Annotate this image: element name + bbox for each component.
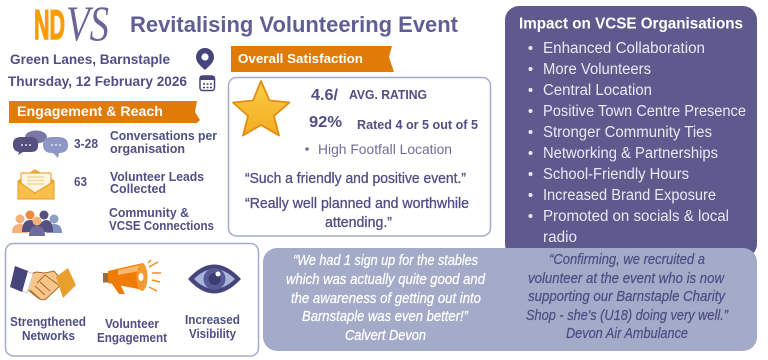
bullet: high footfall: High Footfall Location (318, 141, 452, 157)
quote: Calvert Devon: which was actually quite good and (286, 272, 486, 288)
icon: megaphone (103, 260, 161, 294)
ribbon: engagement and reach: Engagement & Reach (17, 103, 163, 119)
impact list: Stronger Community Ties (543, 124, 712, 141)
quote: Devon Air Ambulance (526, 252, 729, 342)
quote: Devon Air Ambulance: “Confirming, we recruited a (549, 252, 705, 268)
icon: calendar (200, 76, 214, 90)
quote: Devon Air Ambulance: supporting our Barnstaple Charity (528, 289, 726, 305)
impact list: School-Friendly Hours (543, 166, 689, 183)
label: increased visibility (185, 313, 240, 341)
impact list: Positive Town Centre Presence (543, 103, 746, 120)
stat: 63: 63 (74, 175, 87, 189)
quote: Calvert Devon: Calvert Devon (345, 328, 426, 344)
icon: star (233, 81, 290, 136)
rating value: 4.6/ (311, 87, 339, 104)
quote: Calvert Devon: “We had 1 sign up for the stables (293, 253, 478, 269)
date text: Thursday, 12 February 2026 (8, 73, 187, 89)
label: conversations per organisation: organisation (110, 142, 185, 156)
label: increased visibility: Increased (185, 313, 240, 327)
quote: Calvert Devon: Barnstaple was even better!” (302, 309, 469, 325)
impact list: Increased Brand Exposure (543, 187, 716, 204)
impact list: radio (543, 229, 577, 246)
panel: testimonials (263, 248, 757, 351)
quote: well planned: attending.” (325, 215, 392, 231)
quote: well planned: “Really well planned and worthwhile (245, 196, 469, 212)
label: volunteer leads collected (110, 170, 204, 196)
impact list (528, 40, 746, 246)
ribbon: engagement and reach (9, 101, 200, 123)
ribbon: overall satisfaction: Overall Satisfaction (238, 51, 363, 66)
icon: chat bubbles (13, 130, 68, 158)
label: increased visibility: Visibility (189, 327, 236, 341)
label: community and VCSE connections (109, 206, 214, 233)
ribbon: overall satisfaction (231, 46, 394, 72)
label: strengthened networks: Strengthened (10, 315, 86, 329)
icon: eye (188, 264, 241, 294)
stat: 3-28: 3-28 (74, 137, 98, 151)
icon: envelope (18, 170, 54, 199)
label: volunteer leads collected: Volunteer Leads (110, 170, 204, 184)
quote: Calvert Devon: the awareness of getting out into (291, 291, 481, 307)
impact list: Enhanced Collaboration (543, 40, 705, 57)
quote: Devon Air Ambulance: volunteer at the event who is now (528, 271, 725, 287)
rating label: AVG. RATING (349, 88, 427, 102)
percentage value: 92% (309, 114, 342, 131)
impact list: More Volunteers (543, 61, 651, 78)
panel: outcomes (6, 244, 258, 356)
panel: overall satisfaction (228, 78, 490, 236)
label: conversations per organisation (110, 129, 217, 156)
icon: people group (12, 210, 62, 236)
icon: handshake (10, 266, 76, 300)
label: volunteer engagement: Engagement (97, 331, 168, 345)
impact list: Networking & Partnerships (543, 145, 718, 162)
impact list: Central Location (543, 82, 652, 99)
location text: Green Lanes, Barnstaple (10, 51, 170, 67)
quote: Devon Air Ambulance: Shop - she's (U18) doing very well.” (526, 308, 729, 324)
label: strengthened networks (10, 315, 86, 343)
quote: friendly event: “Such a friendly and positive event.” (245, 171, 466, 187)
quote: well planned (245, 196, 469, 231)
label: volunteer leads collected: Collected (110, 182, 166, 196)
label: community and VCSE connections: Community & (109, 206, 189, 220)
panel: impact on VCSE organisations (505, 6, 757, 258)
panel heading: Impact on VCSE Organisations (519, 16, 743, 32)
label: strengthened networks: Networks (22, 329, 75, 343)
percentage label: Rated 4 or 5 out of 5 (357, 118, 478, 132)
label: community and VCSE connections: VCSE Connections (109, 219, 214, 233)
quote: Calvert Devon (286, 253, 486, 344)
quote: Devon Air Ambulance: Devon Air Ambulance (566, 326, 688, 342)
impact list: Promoted on socials & local (543, 208, 729, 225)
label: conversations per organisation: Conversations per (110, 129, 217, 143)
title: Revitalising Volunteering Event (130, 12, 458, 37)
label: volunteer engagement (97, 317, 168, 345)
icon: map pin (196, 48, 214, 70)
logo: NDVS: ND (34, 1, 65, 48)
label: volunteer engagement: Volunteer (105, 317, 159, 331)
